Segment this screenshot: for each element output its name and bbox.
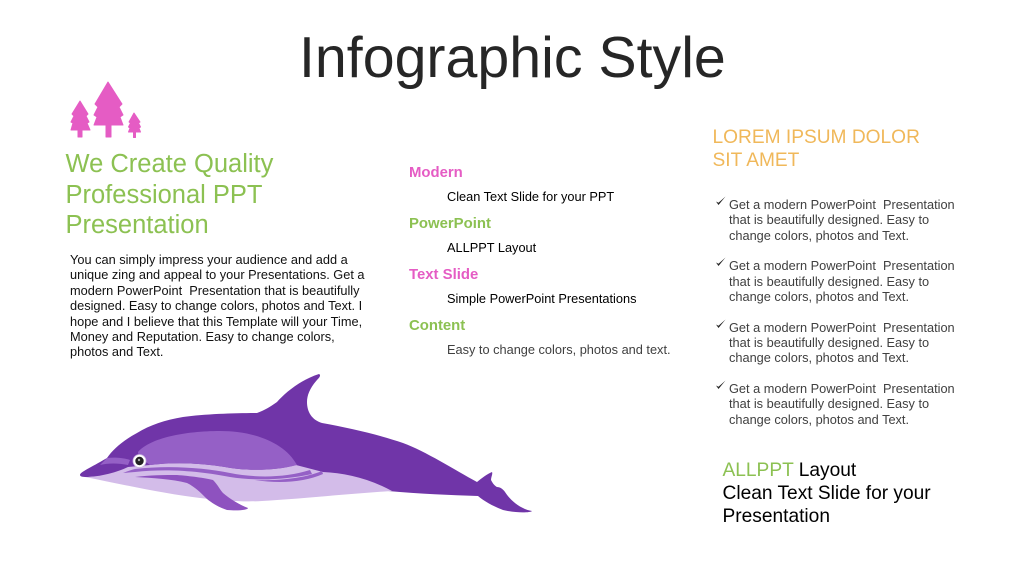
check item 3: Get a modern PowerPoint Presentation bbox=[729, 320, 955, 335]
check item 1: Get a modern PowerPoint Presentation bbox=[729, 197, 955, 212]
icon: pink trees bbox=[70, 82, 141, 138]
heading: we create quality: Presentation bbox=[66, 211, 209, 239]
heading: we create quality: Professional PPT bbox=[66, 181, 263, 209]
heading: lorem ipsum bbox=[712, 127, 920, 171]
text block: intro: hope and I believe that this Template will your Time, bbox=[70, 314, 362, 329]
list heading: content: Content bbox=[409, 318, 465, 334]
check item 1: change colors, photos and Text. bbox=[729, 228, 909, 243]
check item 2: that is beautifully designed. Easy to bbox=[729, 274, 929, 289]
list heading: powerpoint: PowerPoint bbox=[409, 216, 491, 232]
title: Infographic Style bbox=[299, 26, 726, 90]
check item 4 bbox=[716, 380, 955, 427]
dolphin flipper bbox=[135, 475, 248, 510]
text block: intro: You can simply impress your audience and add a bbox=[70, 252, 348, 267]
check item 3: change colors, photos and Text. bbox=[729, 350, 909, 365]
text block: intro: photos and Text. bbox=[70, 344, 163, 359]
check item 3 bbox=[716, 320, 955, 365]
text block: intro bbox=[70, 252, 365, 359]
check item 2 bbox=[716, 258, 955, 304]
check item 4: that is beautifully designed. Easy to bbox=[729, 396, 929, 411]
heading: lorem ipsum: SIT AMET bbox=[712, 150, 799, 171]
list text: content: Easy to change colors, photos and text. bbox=[447, 342, 671, 357]
callout: allppt layout: ALLPPT Layout bbox=[722, 460, 856, 481]
dolphin belly bbox=[85, 463, 392, 501]
callout: allppt layout: Clean Text Slide for your bbox=[722, 483, 931, 504]
dolphin snout stripe bbox=[100, 458, 130, 465]
text block: intro: designed. Easy to change colors, photos and Text. I bbox=[70, 298, 362, 313]
text block: intro: modern PowerPoint Presentation that is beautifully bbox=[70, 283, 360, 298]
heading: we create quality: We Create Quality bbox=[66, 150, 273, 178]
callout: allppt layout: Presentation bbox=[722, 506, 830, 527]
dolphin side patch bbox=[138, 431, 297, 470]
list heading: modern: Modern bbox=[409, 165, 463, 181]
check item 2: Get a modern PowerPoint Presentation bbox=[729, 258, 955, 273]
list text: text slide: Simple PowerPoint Presentations bbox=[447, 291, 636, 306]
dolphin eye bbox=[133, 454, 146, 468]
dolphin stripe upper bbox=[123, 467, 312, 479]
list text: powerpoint: ALLPPT Layout bbox=[447, 240, 536, 255]
list text: modern: Clean Text Slide for your PPT bbox=[447, 189, 614, 204]
check item 1: that is beautifully designed. Easy to bbox=[729, 212, 929, 227]
text block: intro: unique zing and appeal to your Presentations. Get a bbox=[70, 267, 365, 282]
check item 4: Get a modern PowerPoint Presentation bbox=[729, 381, 955, 396]
heading: lorem ipsum: LOREM IPSUM DOLOR bbox=[712, 127, 920, 148]
text block: intro: Money and Reputation. Easy to change colors, bbox=[70, 329, 335, 344]
check item 3: that is beautifully designed. Easy to bbox=[729, 335, 929, 350]
check item 2: change colors, photos and Text. bbox=[729, 289, 909, 304]
check item 4: change colors, photos and Text. bbox=[729, 412, 909, 427]
check item 1 bbox=[716, 196, 955, 243]
dolphin body bbox=[80, 374, 532, 512]
heading: we create quality bbox=[66, 150, 274, 239]
list heading: text slide: Text Slide bbox=[409, 267, 478, 283]
callout: allppt layout bbox=[722, 460, 931, 527]
dolphin stripe lower bbox=[255, 471, 323, 482]
checklist bbox=[716, 196, 955, 427]
